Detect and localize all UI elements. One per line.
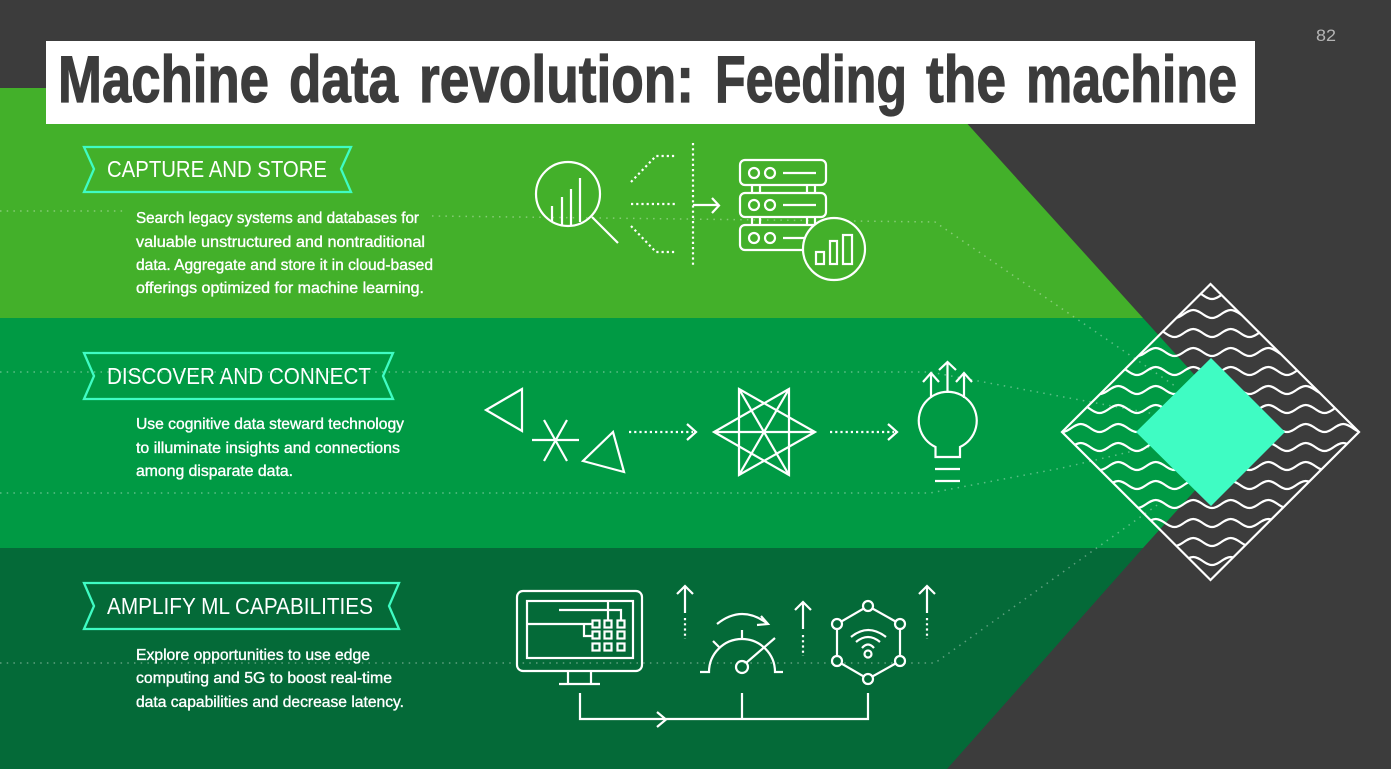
text: capture and store: offerings optimized for machine learning. [136,280,424,297]
text: capture and store: valuable unstructured and nontraditional [136,234,425,251]
heading: capture and store: CAPTURE AND STORE [107,156,327,182]
mint centre diamond [1136,358,1285,506]
text: amplify ML capabilities: Explore opportunities to use edge [136,647,370,664]
title box [46,41,1255,124]
arrow: star to bulb [830,424,897,440]
icon: light bulb with arrows [919,362,977,481]
icon: connected star [714,389,815,475]
text: capture and store: Search legacy systems and databases for [136,210,419,227]
text: discover and connect [136,416,404,480]
heading: discover and connect: DISCOVER AND CONNECT [107,363,371,389]
arrow: up 3 [919,586,935,639]
title: data [289,42,399,116]
icon: dotted branches and arrow [631,143,719,267]
heading: amplify ML capabilities [84,583,399,629]
text: discover and connect: Use cognitive data steward technology [136,416,404,433]
heading: discover and connect [84,353,393,399]
icon: server stack with chart [740,160,865,280]
arrow: bottom connector [580,693,868,727]
text: capture and store: data. Aggregate and store it in cloud-based [136,257,433,274]
arrow: shapes to star [629,424,696,440]
icon: scattered shapes [486,389,624,472]
text: discover and connect: among disparate data. [136,463,293,480]
title: the [926,42,1006,116]
icon: hexagon network with wifi [832,601,905,684]
band: capture and store [0,88,1143,318]
text: amplify ML capabilities: computing and 5G to boost real-time [136,670,392,687]
title: Feeding [715,42,907,116]
icon: magnifier with bars [536,162,618,243]
icon: monitor with grid [517,591,642,684]
text: capture and store [136,210,433,297]
arrow: up 2 [795,602,811,656]
title: Machine [58,42,269,116]
band: discover and connect [0,318,1247,548]
text: amplify ML capabilities [136,647,404,711]
dotted connector lines [0,211,1175,663]
band: amplify ML capabilities [0,548,1143,769]
diamond with waves [1062,284,1362,580]
title: revolution: [419,42,694,116]
arrow: up 1 [677,586,693,639]
page number: 82 [1316,26,1336,45]
icon: gauge [700,614,783,673]
text: discover and connect: to illuminate insights and connections [136,440,400,457]
heading: capture and store [84,147,351,192]
title: machine [1026,42,1237,116]
text: amplify ML capabilities: data capabilities and decrease latency. [136,694,404,711]
heading: amplify ML capabilities: AMPLIFY ML CAPABILITIES [107,593,373,619]
